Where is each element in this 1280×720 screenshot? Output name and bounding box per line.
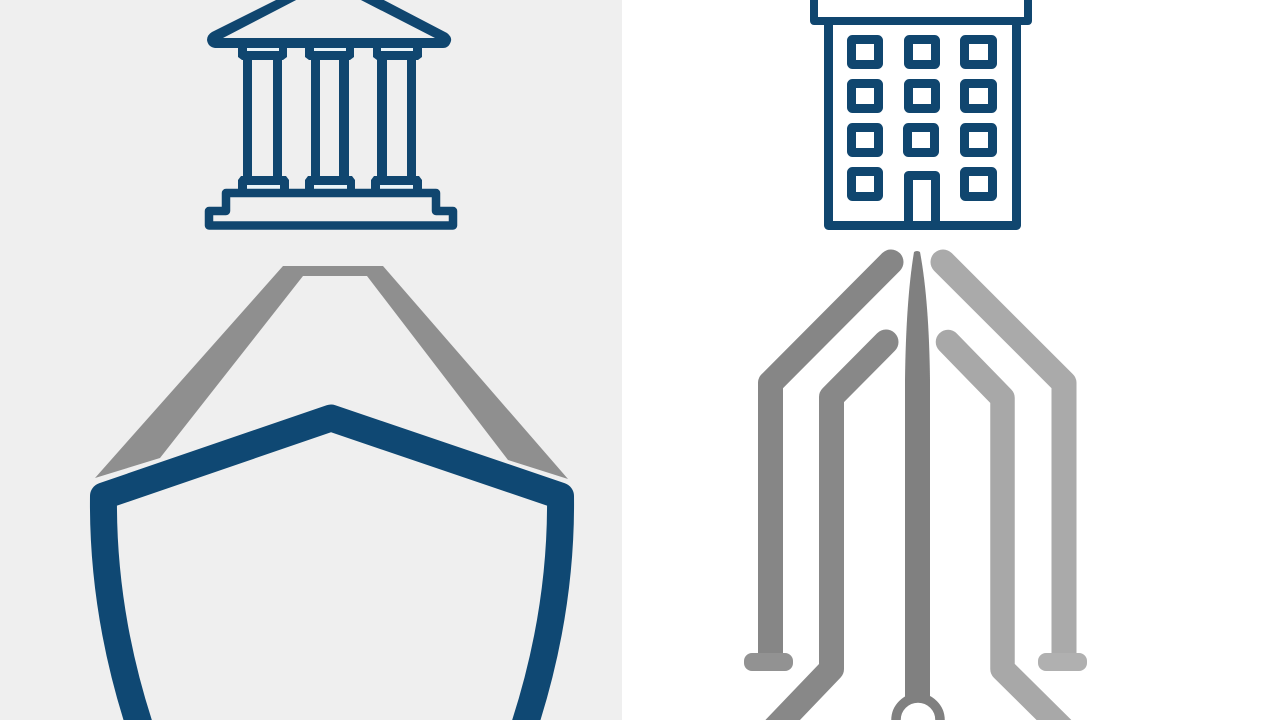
icon: apartment building [814,0,1028,226]
inner left line [775,342,886,720]
pediment roof [207,0,451,48]
icon: grey circuit connector lines [744,251,1087,720]
centre spike [905,251,930,697]
panel: left grey background [0,0,622,720]
panel: right white background [622,0,1280,720]
column two [305,46,355,190]
windows [852,40,992,196]
centre ring [896,698,940,720]
inner right line [948,342,1062,720]
icon: blue shield [103,418,561,720]
outer right foot [1038,653,1087,671]
outer right line [943,262,1064,656]
stepped base [209,193,453,226]
icon: grey roof outline above shield [95,266,568,479]
column one [238,46,289,190]
roof slab [814,0,1028,21]
building outline [828,22,1016,226]
outer left line [770,262,891,656]
outer left foot [744,653,793,671]
door [908,176,936,222]
icon: classical bank building [207,0,453,226]
column three [371,46,422,190]
